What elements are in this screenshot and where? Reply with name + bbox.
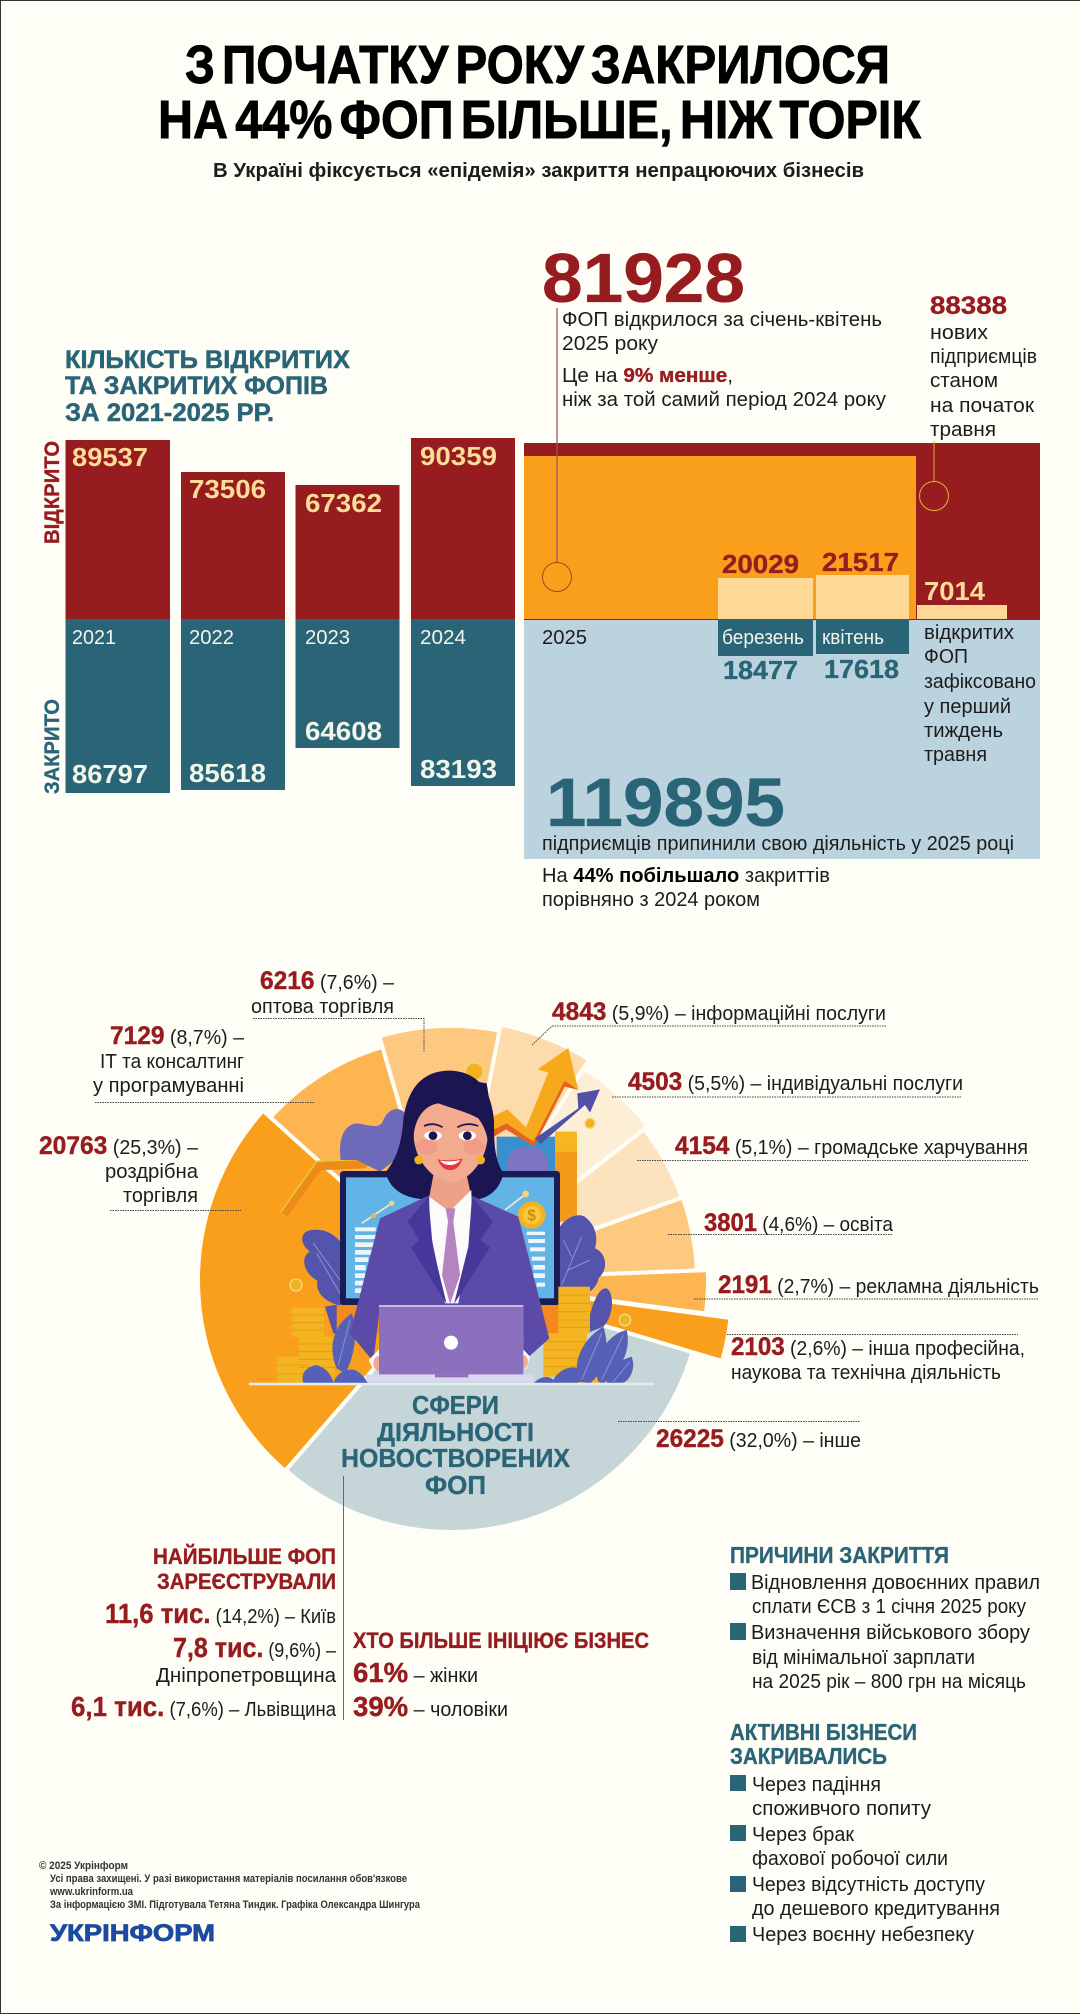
label: IT: ІТ та консалтинг	[100, 1051, 244, 1073]
label: wholesale	[251, 967, 424, 1052]
total closed: підприємців припинили свою діяльність у 2025 році	[542, 833, 1014, 855]
panel: 2025 block	[524, 443, 1040, 859]
label: IT: у програмуванні	[93, 1075, 244, 1097]
slice: information	[451, 1025, 589, 1280]
month: April: квітень	[822, 627, 884, 649]
coin stacks	[277, 1287, 603, 1383]
lower leaves	[302, 1313, 633, 1383]
side leaves	[302, 1215, 612, 1333]
tie	[442, 1208, 460, 1304]
logo: УКРІНФОРМ	[50, 1920, 215, 1947]
callout: opened in May text: тиждень	[924, 720, 1003, 742]
label: retail: торгівля	[123, 1185, 198, 1207]
bar 2021: 89537	[72, 442, 148, 472]
label: retail	[39, 1132, 241, 1210]
panel: active businesses closing: Через воєнну небезпеку	[752, 1924, 974, 1946]
chart block	[497, 1132, 577, 1222]
footer credits: За інформацією ЗМІ. Підготувала Тетяна Тиндик. Графіка Олександра Шингура	[50, 1899, 421, 1911]
axis label: closed: ЗАКРИТО	[40, 699, 64, 794]
panel: active businesses closing: до дешевого кредитування	[752, 1898, 1000, 1920]
callout: 88388 new entrepreneurs: станом	[930, 370, 998, 392]
bar 2024: 90359	[420, 441, 497, 471]
bar 2023: 67362	[305, 488, 382, 518]
panel: active businesses closing: АКТИВНІ БІЗНЕСИ	[730, 1719, 917, 1745]
bar 2022	[181, 472, 285, 790]
label: IT	[93, 1022, 315, 1102]
panel: top regions: 7,8 тис. (9,6%) –	[173, 1632, 337, 1663]
bar 2021	[66, 440, 170, 793]
note: 44% more closures: На 44% побільшало закриттів	[542, 865, 830, 887]
callout: 81928 opened: 2025 року	[562, 333, 658, 355]
title	[158, 35, 922, 150]
slice: other	[286, 1280, 693, 1532]
pie title: СФЕРИ	[412, 1390, 499, 1420]
label: information	[532, 998, 886, 1045]
bar 2021: 86797	[72, 759, 148, 789]
footer credits: www.ukrinform.ua	[49, 1886, 134, 1898]
callout: 88388 new entrepreneurs	[920, 292, 1037, 510]
callout: opened in May text: у перший	[924, 696, 1011, 718]
note: 44% more closures	[542, 865, 830, 911]
callout: 81928 opened	[542, 239, 886, 592]
panel: top regions: 6,1 тис. (7,6%) – Львівщина	[71, 1691, 337, 1722]
slice: IT	[270, 1047, 451, 1280]
callout: opened in May text: ФОП	[924, 646, 968, 668]
panel: top regions	[71, 1544, 337, 1722]
panel: top regions: НАЙБІЛЬШЕ ФОП	[153, 1544, 336, 1569]
slice: personal services	[451, 1068, 648, 1280]
suit	[350, 1195, 549, 1362]
bar 2022: 85618	[189, 758, 266, 788]
chart heading: КІЛЬКІСТЬ ВІДКРИТИХ	[65, 346, 350, 374]
panel: top regions: 11,6 тис. (14,2%) – Київ	[105, 1598, 336, 1629]
slice: retail	[198, 1111, 451, 1471]
callout: 88388 new entrepreneurs: травня	[930, 419, 996, 441]
bar 2023: 64608	[305, 716, 382, 746]
lapels	[408, 1197, 493, 1304]
laptop	[366, 1305, 534, 1382]
callout: opened in May text	[924, 622, 1036, 766]
panel: who starts business: ХТО БІЛЬШЕ ІНІЦІЮЄ БІЗНЕС	[353, 1628, 649, 1653]
panel: who starts business: 39% – чоловіки	[353, 1691, 508, 1722]
label: advertising: 2191 (2,7%) – рекламна діяльність	[718, 1271, 1039, 1299]
face	[408, 1077, 493, 1183]
panel: reasons for closure: ПРИЧИНИ ЗАКРИТТЯ	[730, 1542, 949, 1568]
monitor: $	[527, 1208, 536, 1225]
slice: professional	[451, 1280, 731, 1361]
label: professional: наукова та технічна діяльність	[731, 1362, 1001, 1384]
callout: 88388 new entrepreneurs: підприємців	[930, 346, 1037, 368]
subtitle: В Україні фіксується «епідемія» закриття непрацюючих бізнесів	[213, 160, 864, 182]
panel: top regions: Дніпропетровщина	[156, 1665, 337, 1687]
slice: education	[451, 1198, 697, 1280]
label: wholesale: оптова торгівля	[251, 996, 394, 1018]
label: professional: 2103 (2,6%) – інша професійна,	[731, 1333, 1025, 1361]
panel: active businesses closing: Через брак	[752, 1824, 854, 1846]
hands	[369, 1347, 530, 1371]
orange rising arrow	[494, 1048, 578, 1147]
first week of May: 7014	[924, 576, 986, 606]
callout: 81928 opened: ФОП відкрилося за січень-квітень	[562, 309, 882, 331]
bar 2023: 2023	[305, 627, 350, 649]
background leaves	[340, 1109, 407, 1172]
callout: 88388 new entrepreneurs: 88388	[930, 292, 1007, 320]
slice: food	[451, 1129, 682, 1280]
panel: reasons for closure	[730, 1542, 1040, 1693]
label: information: 4843 (5,9%) – інформаційні послуги	[552, 998, 886, 1026]
chart heading	[65, 346, 350, 427]
slice: wholesale	[379, 1026, 500, 1280]
month: March: березень	[722, 627, 804, 649]
panel: active businesses closing: споживчого попиту	[752, 1798, 931, 1820]
floor line	[249, 1383, 654, 1385]
label: wholesale: 6216 (7,6%) –	[260, 967, 395, 995]
chart heading: ТА ЗАКРИТИХ ФОПІВ	[65, 372, 328, 400]
pale leaf	[507, 1147, 549, 1172]
callout: 88388 new entrepreneurs: на початок	[930, 395, 1034, 417]
pie title: ДІЯЛЬНОСТІ	[377, 1417, 534, 1447]
bar 2022: 73506	[189, 474, 266, 504]
first week of May	[917, 576, 1007, 619]
footer credits: © 2025 Укрінформ	[39, 1860, 128, 1872]
panel: active businesses closing: ЗАКРИВАЛИСЬ	[730, 1743, 887, 1769]
callout: 88388 new entrepreneurs: нових	[930, 322, 988, 344]
shirt	[429, 1190, 472, 1303]
year 2025: 2025	[542, 627, 587, 649]
divider connector	[342, 1476, 344, 1720]
gold coins	[290, 1063, 631, 1326]
panel: reasons for closure: на 2025 рік – 800 грн на місяць	[752, 1671, 1026, 1693]
pie title: ФОП	[425, 1470, 486, 1500]
month: April: 21517	[822, 547, 899, 577]
pie title: НОВОСТВОРЕНИХ	[341, 1443, 571, 1473]
panel: who starts business: 61% – жінки	[353, 1657, 478, 1688]
footer credits: Усі права захищені. У разі використання матеріалів посилання обов'язкове	[50, 1873, 407, 1885]
month: March: 18477	[723, 655, 798, 685]
callout: opened in May text: відкритих	[924, 622, 1014, 644]
callout: opened in May text: зафіксовано	[924, 671, 1036, 693]
callout: 81928 opened: ніж за той самий період 2024 року	[562, 389, 886, 411]
callout: opened in May text: травня	[924, 744, 987, 766]
pie chart: sectors	[198, 1025, 731, 1532]
illustration: businesswoman at laptop	[277, 1048, 633, 1383]
bar chart: 2021-2024	[66, 438, 515, 793]
monitor	[340, 1171, 560, 1305]
month: April	[816, 547, 909, 684]
panel: active businesses closing	[730, 1719, 1000, 1946]
label: food: 4154 (5,1%) – громадське харчування	[675, 1132, 1028, 1160]
bar 2022: 2022	[189, 627, 234, 649]
callout: 81928 opened: 81928	[542, 239, 745, 317]
label: personal services: 4503 (5,5%) – індивідуальні послуги	[628, 1068, 963, 1096]
title: НА 44% ФОП БІЛЬШЕ, НІЖ ТОРІК	[158, 90, 922, 150]
panel: reasons for closure: сплати ЄСВ з 1 січня 2025 року	[752, 1596, 1026, 1618]
total closed: 119895	[546, 764, 785, 841]
panel: reasons for closure: Визначення військового збору	[751, 1622, 1030, 1644]
hair	[386, 1071, 503, 1199]
label: IT: 7129 (8,7%) –	[110, 1022, 245, 1050]
label: professional	[727, 1333, 1025, 1384]
label: retail: 20763 (25,3%) –	[39, 1132, 199, 1160]
panel: reasons for closure: від мінімальної зарплати	[752, 1647, 975, 1669]
blue rising arrow	[535, 1089, 600, 1144]
bar 2023	[296, 485, 400, 748]
month: March: 20029	[722, 549, 799, 579]
pie title	[341, 1390, 571, 1500]
panel: active businesses closing: Через падіння	[752, 1774, 881, 1796]
bar 2024	[411, 438, 515, 786]
panel: top regions: ЗАРЕЄСТРУВАЛИ	[157, 1569, 336, 1594]
chart heading: ЗА 2021-2025 РР.	[65, 399, 274, 427]
callout: 81928 opened: Це на 9% менше,	[562, 365, 733, 387]
axis label: opened: ВІДКРИТО	[40, 441, 64, 544]
total closed	[542, 764, 1014, 855]
bar 2024: 83193	[420, 754, 497, 784]
label: retail: роздрібна	[105, 1161, 199, 1183]
label: education: 3801 (4,6%) – освіта	[704, 1209, 894, 1237]
slice: advertising	[451, 1270, 708, 1314]
left growth arrow	[281, 1137, 402, 1214]
orange stand	[337, 1305, 560, 1333]
panel: active businesses closing: фахової робочої сили	[752, 1848, 948, 1870]
note: 44% more closures: порівняно з 2024 роком	[542, 889, 760, 911]
footer credits	[39, 1860, 421, 1911]
panel: reasons for closure: Відновлення довоєнних правил	[751, 1572, 1040, 1594]
bar 2024: 2024	[420, 627, 466, 649]
neck	[429, 1172, 471, 1218]
title: З ПОЧАТКУ РОКУ ЗАКРИЛОСЯ	[185, 35, 890, 95]
panel: who starts business	[353, 1628, 649, 1722]
month: March	[718, 549, 813, 685]
panel: active businesses closing: Через відсутність доступу	[752, 1874, 985, 1896]
label: other: 26225 (32,0%) – інше	[656, 1425, 861, 1453]
bar 2021: 2021	[72, 627, 116, 649]
month: April: 17618	[824, 654, 899, 684]
